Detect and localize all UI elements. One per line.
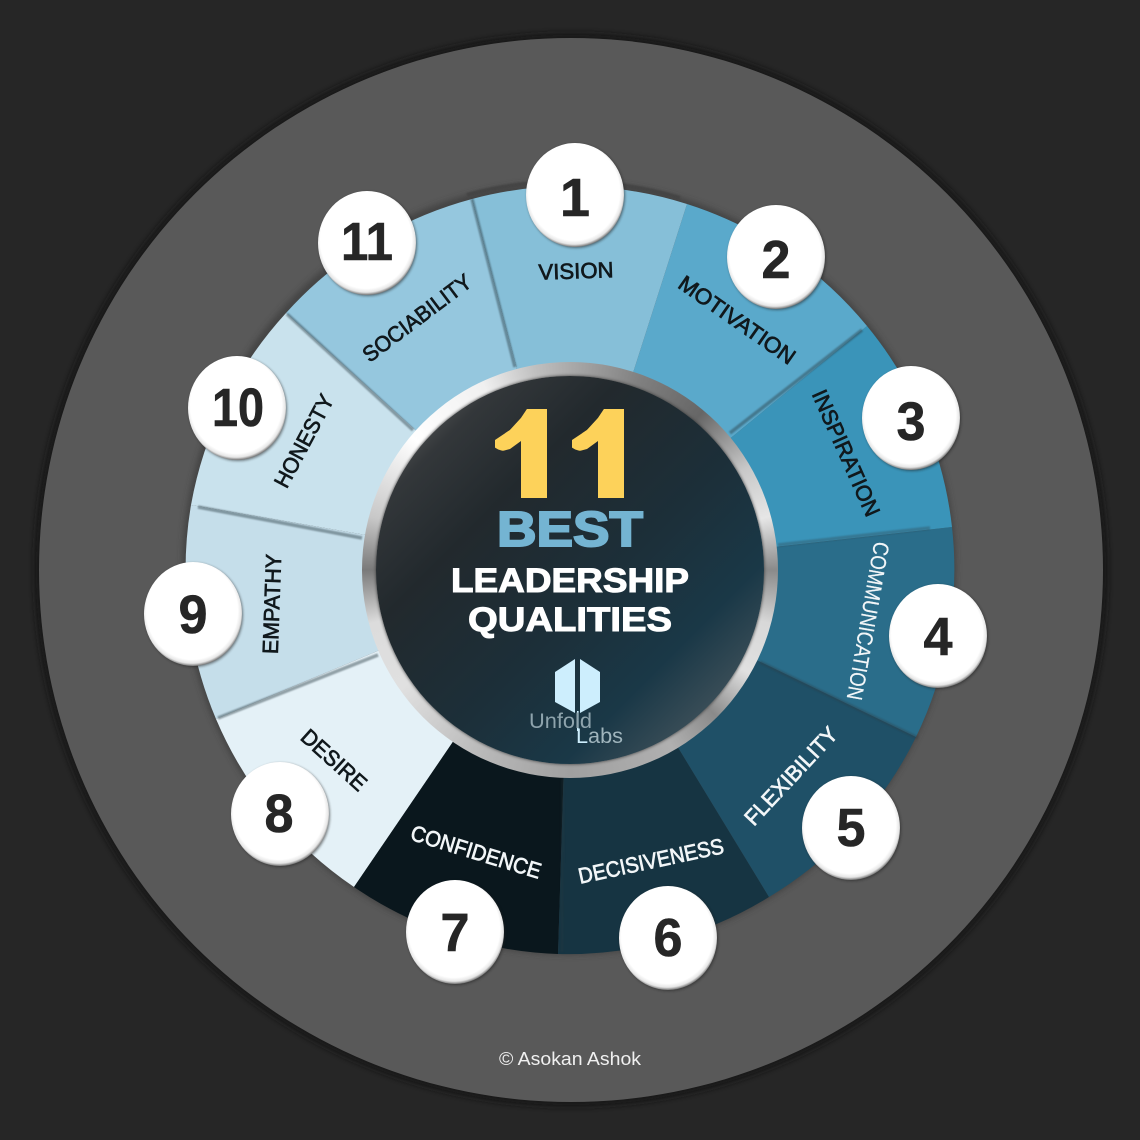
label: inspiration: INSPIRATION	[807, 386, 885, 520]
label: decisiveness: DECISIVENESS	[576, 833, 726, 889]
segment 8 desire	[216, 570, 570, 887]
label: communication: COMMUNICATION	[842, 540, 894, 702]
badge 11	[318, 191, 417, 296]
badge 2	[727, 205, 826, 310]
segment 4 communication	[570, 527, 954, 737]
title: qualities: QUALITIES	[468, 601, 672, 639]
label: vision: VISION	[538, 257, 614, 285]
label: flexibility: FLEXIBILITY	[739, 722, 843, 830]
badge 2: 2	[762, 230, 790, 290]
label: empathy: EMPATHY	[258, 553, 286, 654]
badge 8: 8	[264, 784, 294, 844]
segment 6 decisiveness	[558, 570, 769, 954]
title: best: BEST	[497, 503, 643, 557]
badge 6	[619, 886, 718, 991]
logo word labs: Labs	[576, 725, 623, 748]
segment 2 motivation	[570, 204, 867, 570]
segment 5 flexibility	[570, 570, 916, 897]
badge 3: 3	[896, 392, 926, 452]
logo stem	[577, 711, 579, 731]
segment labels	[258, 257, 894, 889]
label: confidence: CONFIDENCE	[408, 820, 544, 884]
segment 10 honesty	[191, 313, 570, 570]
badge 3	[862, 366, 961, 471]
label: motivation: MOTIVATION	[674, 270, 800, 370]
badge 1: 1	[560, 168, 590, 228]
logo: unfold labs	[529, 659, 623, 748]
badge 5	[802, 776, 901, 881]
label: sociability: SOCIABILITY	[358, 269, 477, 367]
label: desire: DESIRE	[296, 724, 372, 796]
number badges	[144, 143, 988, 991]
metallic ring	[362, 362, 778, 778]
segment 7 confidence	[354, 570, 570, 954]
credit: © Asokan Ashok	[499, 1049, 642, 1069]
badge 4	[889, 584, 988, 689]
badge 6: 6	[654, 908, 682, 968]
logo word unfold: Unfold	[529, 710, 592, 733]
badge 8	[231, 762, 330, 867]
badge 7: 7	[440, 903, 470, 963]
segment 1 vision	[472, 186, 687, 570]
segment 9 empathy	[186, 505, 570, 719]
logo mark right half	[580, 659, 600, 713]
logo mark left half	[555, 659, 575, 713]
badge 9	[144, 562, 243, 667]
wheel shadow	[182, 181, 956, 955]
badge 10	[188, 356, 287, 461]
label: honesty: HONESTY	[269, 390, 339, 492]
segment 3 inspiration	[570, 326, 952, 570]
segment wheel	[186, 186, 954, 954]
title: 11: 11	[497, 381, 642, 517]
badge 4: 4	[924, 607, 952, 667]
title: leadership: LEADERSHIP	[451, 562, 689, 600]
badge 7	[406, 880, 505, 985]
centre title and logo	[452, 409, 688, 743]
segment 11 sociability	[286, 199, 570, 570]
centre disc	[376, 376, 764, 764]
badge 10: 10	[212, 378, 264, 438]
badge 9: 9	[178, 585, 208, 645]
badge 5: 5	[836, 798, 866, 858]
badge 1	[526, 143, 625, 248]
badge 11: 11	[341, 212, 393, 272]
